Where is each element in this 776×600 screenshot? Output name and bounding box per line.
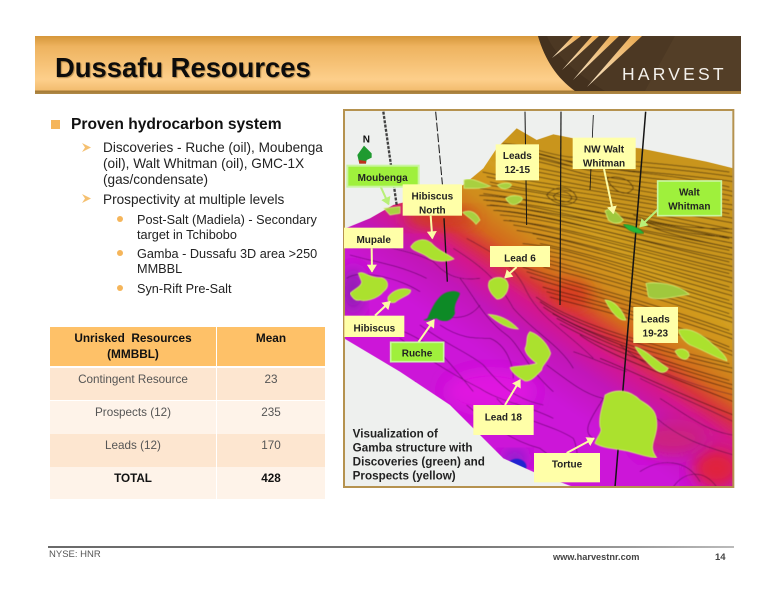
- ticker: NYSE: HNR: [49, 549, 101, 560]
- label: Moubenga: Moubenga: [358, 173, 408, 184]
- label: Lead 18: Lead 18: [485, 412, 522, 423]
- label: Leads 12-15: Leads: [503, 151, 532, 162]
- row prospects: [50, 401, 325, 434]
- callout arrows: [372, 169, 658, 453]
- label: Mupale: Mupale: [356, 235, 391, 246]
- label: Hibiscus: [344, 316, 404, 337]
- main bullet heading: Proven hydrocarbon system: [71, 116, 282, 132]
- syn-rift text: Syn-Rift Pre-Salt: [137, 282, 231, 296]
- label: Moubenga: [347, 166, 419, 187]
- table header row: Mean: [256, 331, 286, 345]
- footer: [48, 546, 734, 563]
- panel border: [344, 110, 733, 487]
- website: www.harvestnr.com: [553, 552, 639, 562]
- gamba text: [137, 247, 317, 276]
- row leads: 170: [261, 439, 281, 452]
- map caption: Discoveries (green) and: [353, 456, 485, 469]
- logo wordmark: HARVEST: [622, 64, 727, 84]
- label: Tortue: [534, 453, 600, 482]
- post-salt text: target in Tchibobo: [137, 228, 237, 242]
- map panel: Gamba structure visualization: [343, 109, 734, 488]
- discoveries text: [103, 140, 323, 187]
- gamba text: Gamba - Dussafu 3D area >250: [137, 247, 317, 261]
- contour lines: [476, 144, 737, 415]
- dot bullet three: [117, 285, 123, 291]
- label: Lead 6: [490, 246, 550, 267]
- row total: TOTAL: [114, 472, 152, 485]
- discovery areas (green): [423, 224, 644, 321]
- label: Leads 19-23: 19-23: [643, 328, 669, 339]
- post-salt text: [137, 213, 317, 242]
- prospect areas (yellow): [350, 179, 727, 458]
- discoveries text: (gas/condensate): [103, 172, 208, 187]
- map caption: Visualization of: [353, 427, 438, 440]
- north arrow: N: [363, 134, 370, 145]
- label: Hibiscus North: North: [419, 205, 446, 216]
- north arrow: [357, 134, 372, 164]
- discoveries text: Discoveries - Ruche (oil), Moubenga: [103, 140, 323, 155]
- map caption: Gamba structure with: [353, 441, 472, 454]
- map caption: Prospects (yellow): [353, 470, 456, 483]
- label: Hibiscus: Hibiscus: [353, 323, 396, 334]
- arrow bullet two: [82, 194, 91, 203]
- label: Lead 18: [473, 405, 534, 435]
- row prospects: 235: [261, 406, 281, 419]
- label: NW Walt Whitman: [573, 138, 636, 170]
- row contingent resource: Contingent Resource: [78, 373, 188, 386]
- label: Walt Whitman: Walt: [679, 188, 700, 199]
- label: Leads 12-15: 12-15: [505, 165, 531, 176]
- label: Walt Whitman: [658, 181, 721, 216]
- row contingent resource: 23: [264, 373, 278, 386]
- post-salt text: Post-Salt (Madiela) - Secondary: [137, 213, 317, 227]
- logo panel: [538, 36, 741, 91]
- label: Hibiscus North: Hibiscus: [411, 191, 454, 202]
- label: Mupale: [344, 228, 403, 248]
- dot bullet two: [117, 250, 123, 256]
- label: Leads 12-15: [496, 144, 539, 180]
- label: Tortue: Tortue: [552, 460, 583, 471]
- row contingent resource: [50, 368, 325, 400]
- title: Dussafu Resources: [55, 52, 311, 83]
- label: NW Walt Whitman: Whitman: [583, 159, 625, 170]
- dot bullet one: [117, 216, 123, 222]
- label: Ruche: [391, 342, 444, 362]
- table header row: (MMBBL): [107, 346, 159, 360]
- square bullet: [51, 120, 60, 129]
- prospectivity text: Prospectivity at multiple levels: [103, 192, 284, 207]
- terrain surface: [343, 110, 740, 488]
- gamba text: MMBBL: [137, 262, 182, 276]
- discoveries text: (oil), Walt Whitman (oil), GMC-1X: [103, 156, 304, 171]
- label: Lead 6: Lead 6: [504, 253, 536, 264]
- label: Ruche: Ruche: [402, 349, 433, 360]
- map caption: [353, 427, 485, 483]
- row leads: [50, 434, 325, 467]
- label: Leads 19-23: [633, 307, 678, 343]
- row total: 428: [261, 472, 281, 485]
- label: Hibiscus North: [403, 184, 462, 216]
- label: Leads 19-23: Leads: [641, 314, 670, 325]
- row prospects: Prospects (12): [95, 406, 171, 419]
- resources table: [50, 327, 325, 499]
- table header row: [50, 327, 325, 366]
- arrow bullet one: [82, 143, 91, 152]
- well paths: [383, 112, 646, 487]
- page number: 14: [715, 552, 726, 563]
- label: Walt Whitman: Whitman: [668, 202, 710, 213]
- table header row: Unrisked Resources: [74, 331, 192, 345]
- row leads: Leads (12): [105, 439, 161, 452]
- header banner: [35, 36, 741, 94]
- row total: [50, 467, 325, 499]
- label: NW Walt Whitman: NW Walt: [584, 145, 625, 156]
- bullet list: [51, 116, 323, 296]
